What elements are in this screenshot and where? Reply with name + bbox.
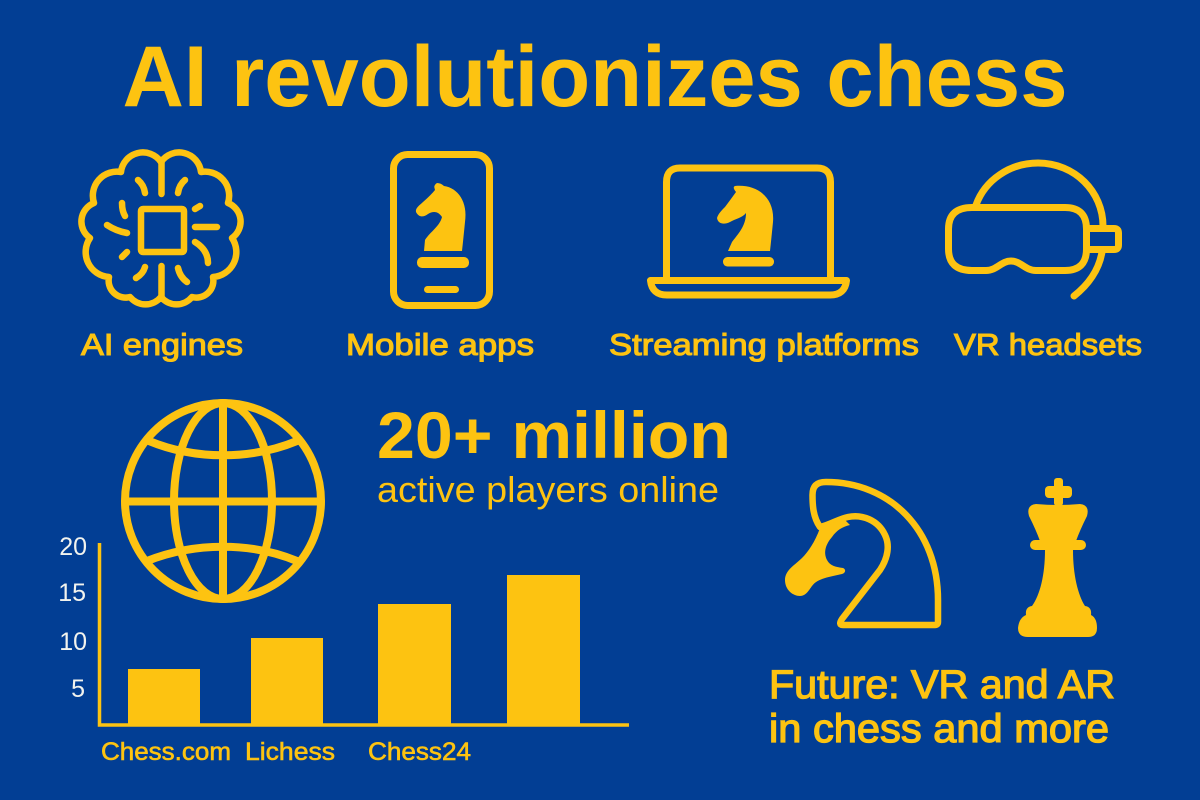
- x axis labels: [101, 738, 471, 766]
- y axis labels: 15: [58, 579, 86, 607]
- y axis labels: 10: [59, 628, 87, 656]
- icon: VR headset: [948, 163, 1118, 296]
- statistic caption: active players online: [377, 469, 719, 510]
- label: Mobile apps: Mobile apps: [346, 327, 534, 362]
- x axis labels: Chess24: [368, 738, 471, 766]
- future caption: Future: VR and AR: [769, 663, 1115, 707]
- x axis labels: Chess.com: [101, 738, 231, 766]
- y axis labels: 20: [59, 533, 87, 561]
- title: AI revolutionizes chess: [122, 29, 1068, 125]
- y axis labels: 5: [71, 675, 85, 703]
- icon: knight outline: [785, 482, 938, 625]
- icon: laptop with knight: [650, 168, 846, 295]
- icon: mobile phone with knight: [394, 154, 490, 306]
- x axis labels: Lichess: [245, 738, 335, 766]
- chart axes: [100, 543, 629, 725]
- bars: [128, 575, 580, 725]
- y axis labels: [58, 533, 87, 703]
- label: VR headsets: VR headsets: [954, 327, 1142, 362]
- icon: globe: [125, 403, 321, 599]
- statistic: 20+ million: 20+ million: [377, 398, 731, 472]
- label: Streaming platforms: Streaming platforms: [609, 327, 919, 362]
- icon: AI brain chip: [81, 152, 241, 304]
- label: AI engines: AI engines: [81, 327, 243, 362]
- future caption: in chess and more: [769, 707, 1109, 751]
- bar chart: [58, 533, 629, 766]
- icon: king filled: [1018, 478, 1097, 637]
- future caption: [769, 663, 1115, 751]
